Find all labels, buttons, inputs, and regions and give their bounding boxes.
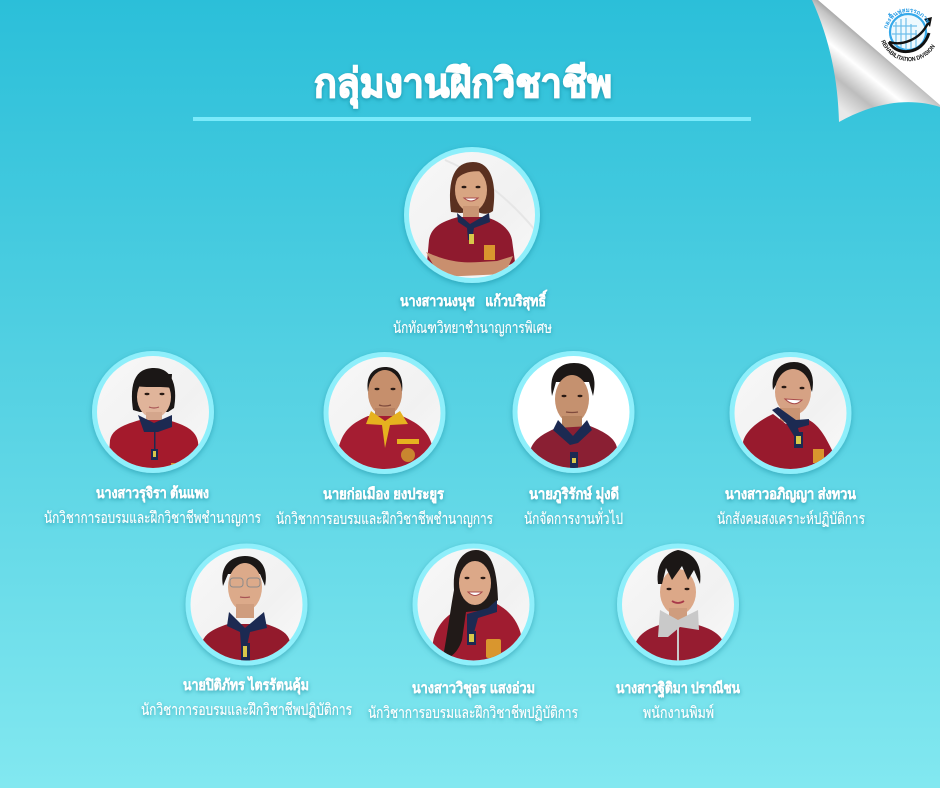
position: นักวิชาการอบรมและฝึกวิชาชีพชำนาญการ — [276, 510, 493, 528]
position: นักวิชาการอบรมและฝึกวิชาชีพปฏิบัติการ — [141, 701, 352, 719]
name: นางสาววิชุอร แสงอ่วม — [412, 679, 535, 698]
position: นักวิชาการอบรมและฝึกวิชาชีพชำนาญการ — [44, 509, 261, 527]
logo: rehabilitation division: กองฟื้นฟูสมรรถภาพ — [884, 8, 930, 29]
position: นักทัณฑวิทยาชำนาญการพิเศษ — [393, 320, 552, 337]
name: นายภูริรักษ์ มุ่งดี — [529, 485, 619, 504]
position: นักจัดการงานทั่วไป — [524, 507, 623, 528]
person: head of group — [393, 145, 552, 337]
name: นางสาวรุจิรา ต้นแพง — [96, 484, 209, 503]
portrait: นางสาวอภิญญา — [732, 355, 848, 471]
person: นางสาวฐิติมา — [616, 544, 741, 722]
name: นายปิติภัทร ไตรรัตนคุ้ม — [183, 675, 309, 695]
person: นางสาวรุจิรา — [44, 351, 261, 527]
person: นายปิติภัทร — [141, 544, 352, 719]
position: นักวิชาการอบรมและฝึกวิชาชีพปฏิบัติการ — [368, 704, 578, 722]
name: นายก่อเมือง ยงประยูร — [323, 486, 445, 504]
person: นายก่อเมือง — [276, 352, 493, 528]
name: นางสาวนงนุช แก้วบริสุทธิ์ — [400, 289, 548, 311]
person: นางสาวอภิญญา — [717, 352, 865, 528]
person: นางสาววิชุอร — [368, 544, 578, 722]
portrait: นายปิติภัทร — [188, 546, 304, 662]
name: นางสาวอภิญญา ส่งทวน — [725, 485, 857, 503]
title underline — [193, 117, 751, 121]
portrait: นางสาวนงนุช — [409, 152, 535, 278]
portrait: นายก่อเมือง — [326, 355, 442, 471]
person: นายภูริรักษ์ — [512, 351, 634, 528]
portrait: นายภูริรักษ์ — [515, 354, 631, 470]
logo: rehabilitation division — [881, 8, 935, 62]
page curl corner — [812, 0, 940, 122]
portrait: นางสาวรุจิรา — [95, 354, 211, 470]
title: กลุ่มงานฝึกวิชาชีพ — [314, 62, 612, 109]
position: นักสังคมสงเคราะห์ปฏิบัติการ — [717, 509, 865, 528]
logo: rehabilitation division: REHABILITATION DIVISION — [881, 40, 935, 62]
portrait: นางสาววิชุอร — [415, 546, 531, 662]
position: พนักงานพิมพ์ — [643, 703, 714, 722]
portrait: นางสาวฐิติมา — [620, 546, 736, 662]
name: นางสาวฐิติมา ปราณีชน — [616, 679, 741, 698]
